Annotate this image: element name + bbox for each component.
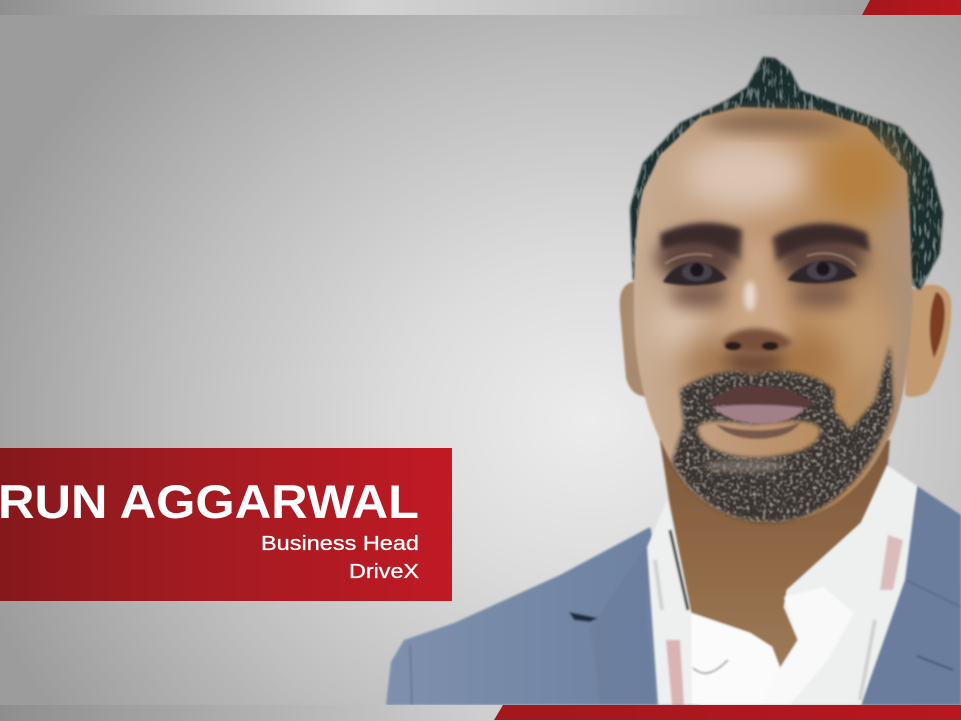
name banner — [0, 448, 452, 601]
portrait: eyebrows — [660, 223, 870, 262]
banner: name: RUN AGGARWAL — [0, 475, 419, 528]
portrait: facial shading — [650, 113, 900, 391]
portrait: shirt and lanyard — [647, 465, 917, 705]
portrait: hair — [630, 57, 943, 290]
top decorative band — [0, 0, 961, 15]
portrait: ears — [620, 282, 951, 397]
banner: red background — [0, 448, 452, 601]
banner: company: DriveX — [349, 561, 419, 583]
portrait of the speaker — [386, 57, 961, 705]
banner: job title: Business Head — [261, 533, 419, 555]
portrait: beard — [672, 345, 893, 522]
portrait: eyes — [663, 253, 857, 285]
portrait: nose — [722, 240, 792, 352]
portrait: eye sockets — [656, 232, 866, 308]
portrait: face — [634, 107, 913, 522]
portrait: mouth — [708, 386, 815, 439]
portrait: chin hair grey band — [703, 459, 787, 473]
portrait: neck — [660, 440, 890, 668]
portrait: jacket — [386, 486, 961, 705]
bottom decorative band — [0, 705, 961, 721]
